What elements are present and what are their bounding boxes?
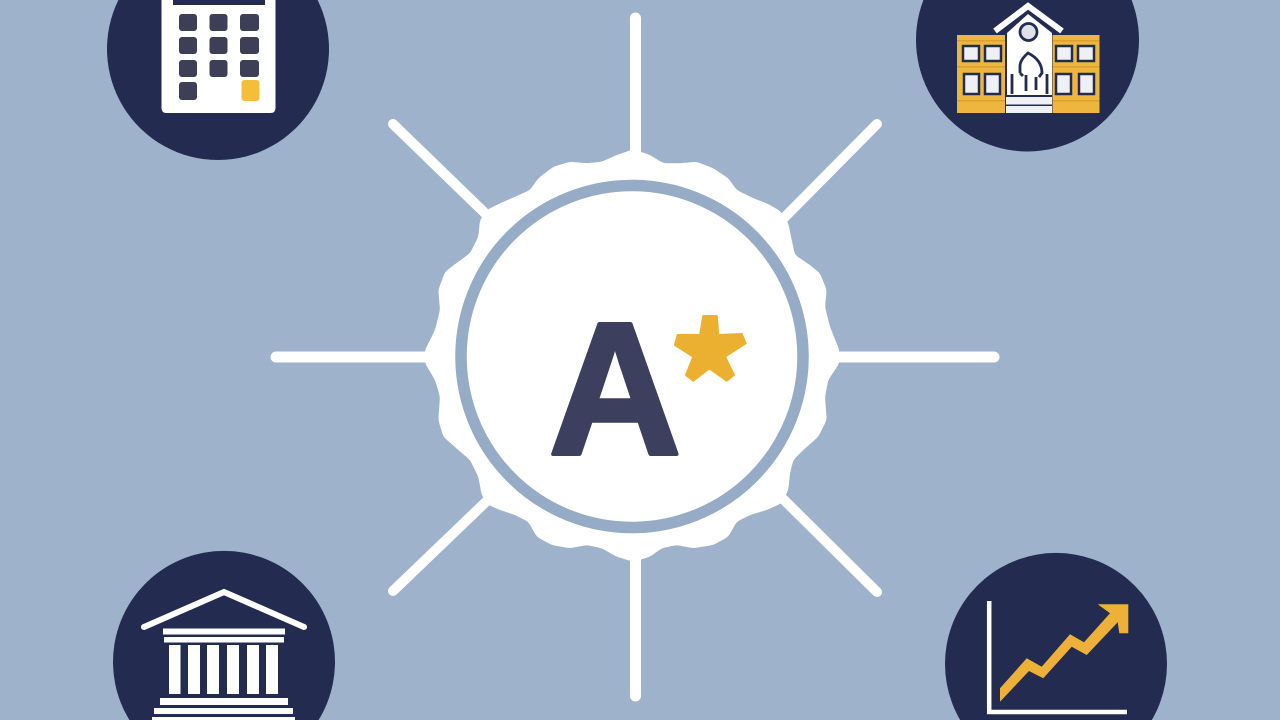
icon: gold star: [675, 316, 746, 381]
icon: school building: [916, 0, 1139, 151]
rising arrow: [1000, 604, 1128, 702]
central scalloped badge: [425, 149, 839, 562]
badge inner ring: [461, 186, 803, 528]
icon: calculator: [107, 0, 329, 160]
chart axes: [989, 601, 1127, 712]
icon: rising line chart: [945, 553, 1167, 720]
icon: classical bank building: [113, 551, 335, 720]
grade letter A: A: [548, 284, 682, 495]
radiating rays: [276, 18, 994, 696]
